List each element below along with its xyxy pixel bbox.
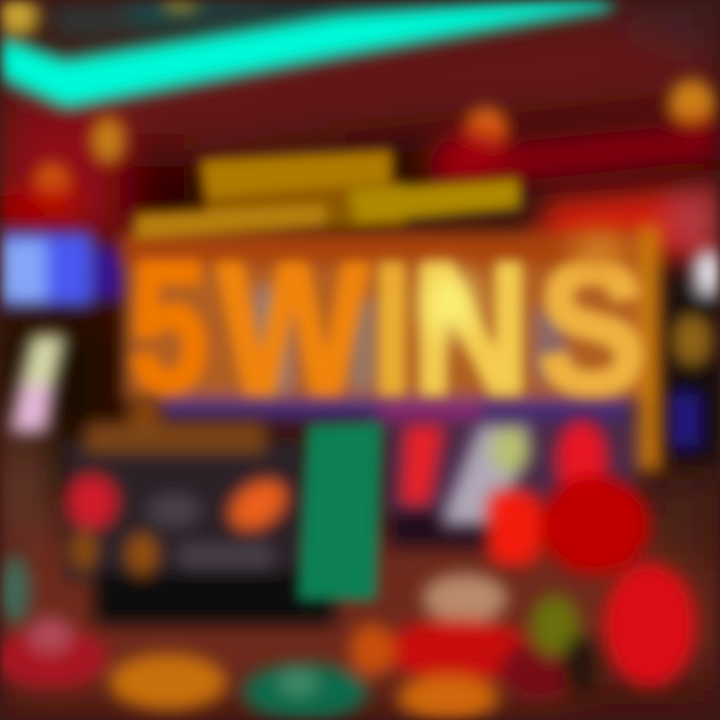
neon teal ceiling strip — [0, 0, 610, 108]
green panel — [298, 422, 382, 600]
slot reels — [400, 420, 608, 525]
right side machine — [668, 250, 720, 460]
dark teal ceiling recess — [40, 0, 620, 35]
large title: 5WINS: W — [218, 226, 368, 432]
large title: 5WINS: S — [538, 226, 646, 432]
left blue screen — [0, 232, 128, 306]
dark game console — [65, 400, 335, 624]
red glow strips — [0, 122, 720, 222]
large title: 5WINS: I — [372, 226, 412, 432]
red casino chips stack — [488, 475, 696, 687]
large title: 5WINS — [130, 224, 646, 432]
gold headline bars — [135, 150, 520, 240]
slot machine sign panel — [120, 225, 660, 546]
title highlight — [426, 234, 630, 337]
large title: 5WINS: N — [412, 226, 530, 432]
red signage on right — [530, 185, 720, 260]
left slim light panel — [10, 335, 66, 432]
ceiling lights — [0, 0, 715, 207]
large title: 5WINS: 5 — [130, 224, 208, 430]
foreground chips and table items — [0, 556, 598, 720]
